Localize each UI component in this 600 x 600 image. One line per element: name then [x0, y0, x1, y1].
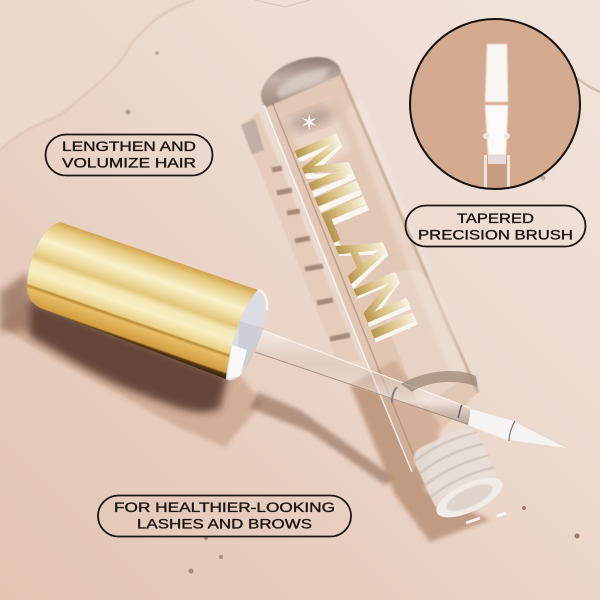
tube lower refraction: [350, 360, 490, 542]
callout: lengthen and volumize hair: [46, 134, 212, 176]
long shadow streak: [250, 392, 395, 485]
inset circle: brush close-up: [410, 19, 580, 192]
inner rod: [378, 270, 468, 410]
liquid tan zone under cap: [0, 300, 262, 447]
tube body: [261, 57, 478, 472]
gold cap: [27, 222, 267, 380]
highlights under neck: [466, 513, 506, 523]
callout: healthier-looking lashes and brows: [98, 496, 351, 536]
callout: healthier-looking lashes and brows: LASHES AND BROWS: [137, 516, 312, 532]
callout: tapered precision brush: PRECISION BRUSH: [418, 228, 573, 242]
callout: lengthen and volumize hair: LENGTHEN AND: [62, 139, 196, 154]
bottle top rim: [261, 57, 341, 107]
callout: healthier-looking lashes and brows: FOR HEALTHIER-LOOKING: [114, 500, 335, 515]
refracted band left of tube: [241, 112, 360, 362]
wand stem: [255, 330, 478, 425]
brush tip: [468, 409, 566, 448]
bottle neck: [409, 423, 508, 525]
cap shadow: [0, 272, 228, 412]
callout: tapered precision brush: TAPERED: [457, 211, 534, 226]
callout: lengthen and volumize hair: VOLUMIZE HAIR: [62, 156, 196, 170]
star: ✶: [300, 111, 318, 136]
bottle tube: [241, 57, 490, 542]
brand lettering: MILANI: [280, 124, 431, 348]
brand lettering: MILANI: [283, 129, 433, 353]
callout: tapered precision brush: [406, 206, 586, 246]
